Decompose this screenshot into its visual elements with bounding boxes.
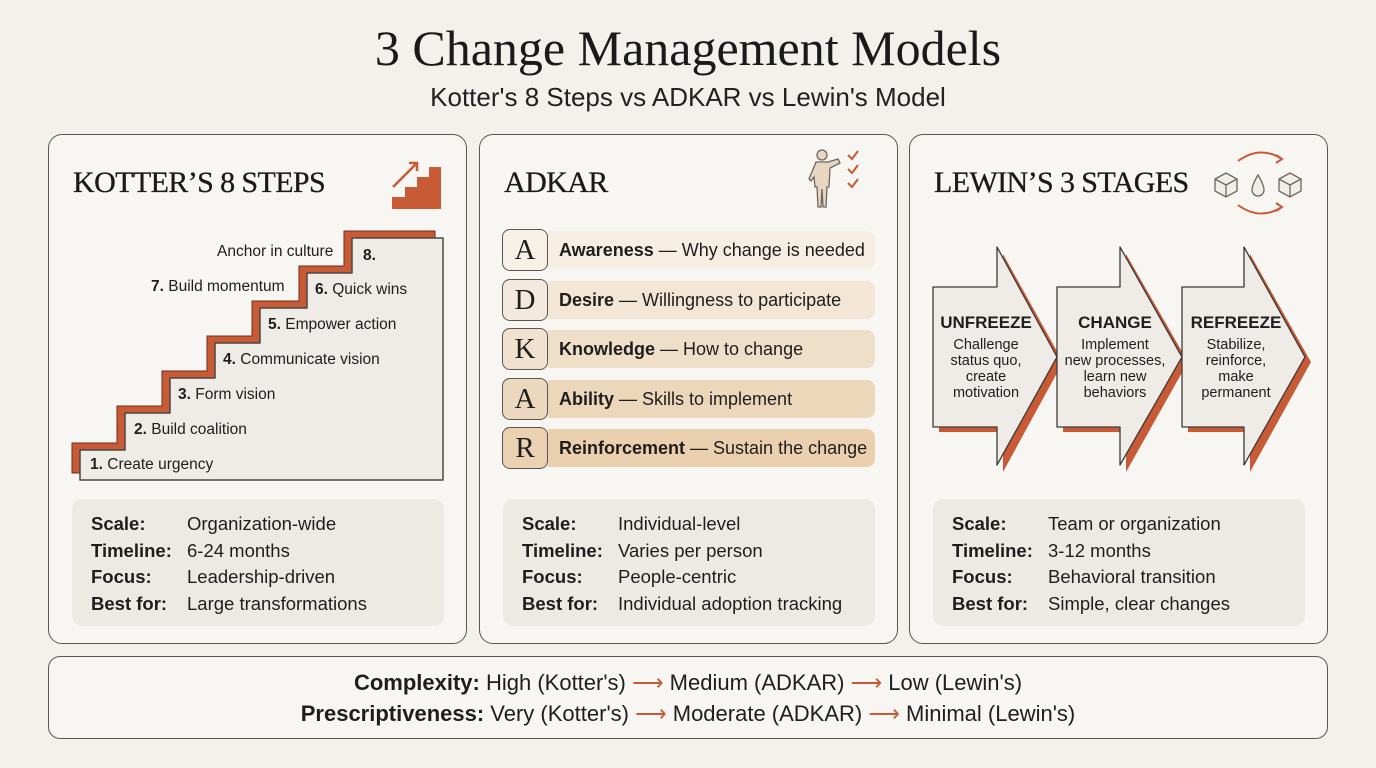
comparison box: Prescriptiveness: Very (Kotter's) ⟶ Moderate (ADKAR) ⟶ Minimal (Lewin's) [301,701,1075,726]
stage texts: permanent [1201,385,1271,401]
info box: kotter: Best for: [91,592,167,614]
step labels: 8. [363,247,376,264]
stage texts: make [1218,369,1254,385]
stage texts: Implement [1081,337,1149,353]
info box: lewin: Timeline: [952,540,1033,560]
stage texts [940,313,1281,401]
panel: lewin [909,134,1328,644]
adkar rows: Awareness — Why change is needed [559,240,865,260]
adkar rows: K [515,333,535,365]
adkar rows: A [515,383,535,415]
adkar rows: Knowledge — How to change [559,339,803,359]
adkar rows [502,229,875,469]
info box: adkar [503,499,875,626]
heading: kotter: KOTTER’S 8 STEPS [73,166,325,199]
adkar rows: Ability — Skills to implement [559,389,792,409]
heading: adkar: ADKAR [504,166,608,199]
adkar rows: R [515,432,535,464]
info box: lewin: Simple, clear changes [1048,592,1230,614]
info box: adkar: Best for: [522,592,598,614]
staircase chart [72,230,444,481]
stage texts: CHANGE [1078,313,1152,332]
stage texts: UNFREEZE [940,313,1032,332]
panel: kotter [48,134,467,644]
info box: adkar: Varies per person [618,540,763,560]
adkar rows: Reinforcement — Sustain the change [559,438,867,458]
stage texts: learn new [1084,369,1146,385]
stage texts: behaviors [1084,385,1146,401]
stage texts: Stabilize, [1207,337,1265,353]
stage arrows [932,246,1311,472]
info box: kotter: Scale: [91,513,146,534]
adkar rows: Desire — Willingness to participate [559,290,841,310]
icon: person with checks [808,149,859,208]
icon: stairs [392,162,441,209]
info box: lewin: Best for: [952,592,1028,614]
info box: adkar: People-centric [618,566,736,587]
info box: kotter: Leadership-driven [187,566,335,587]
heading: lewin: LEWIN’S 3 STAGES [934,166,1189,199]
step labels: Anchor in culture [217,243,333,260]
stage texts: Challenge [953,337,1019,353]
info box: lewin [933,499,1305,626]
step labels: 6. Quick wins [315,281,407,298]
step labels: 4. Communicate vision [223,351,380,368]
info box: adkar: Timeline: [522,540,603,560]
step labels: 7. Build momentum [151,278,285,295]
step labels: 1. Create urgency [90,456,213,473]
step labels: 3. Form vision [178,386,275,403]
adkar rows: D [515,284,535,316]
info box: kotter: 6-24 months [187,540,290,560]
info box: lewin: Behavioral transition [1048,566,1216,587]
step labels: 5. Empower action [268,316,396,333]
adkar rows: A [515,234,535,266]
stage texts: new processes, [1065,353,1165,369]
info box: kotter: Organization-wide [187,513,336,534]
stage texts: motivation [953,385,1019,401]
icon: ice-water-ice cycle [1214,152,1302,214]
info box: adkar: Scale: [522,513,577,534]
info box: kotter: Timeline: [91,540,172,560]
stage texts: create [966,369,1006,385]
stage texts: status quo, [951,353,1021,369]
info box: adkar: Individual adoption tracking [618,592,842,614]
stage texts: reinforce, [1206,353,1266,369]
title: 3 Change Management Models [375,20,1001,76]
info box: lewin: Team or organization [1048,513,1221,534]
info box: kotter [72,499,444,626]
step labels: 2. Build coalition [134,421,247,438]
info box: kotter: Focus: [91,566,152,587]
stage texts: REFREEZE [1191,313,1281,332]
info box: adkar: Focus: [522,566,583,587]
step labels [90,243,407,473]
info box: lewin: 3-12 months [1048,540,1151,560]
subtitle: Kotter's 8 Steps vs ADKAR vs Lewin's Model [430,82,946,112]
comparison box: Complexity: High (Kotter's) ⟶ Medium (ADKAR) ⟶ Low (Lewin's) [354,670,1022,695]
info box: lewin: Focus: [952,566,1013,587]
info box: lewin: Scale: [952,513,1007,534]
panel: adkar [479,134,898,644]
info box: adkar: Individual-level [618,513,740,534]
comparison box [48,656,1328,739]
info box: kotter: Large transformations [187,592,367,614]
